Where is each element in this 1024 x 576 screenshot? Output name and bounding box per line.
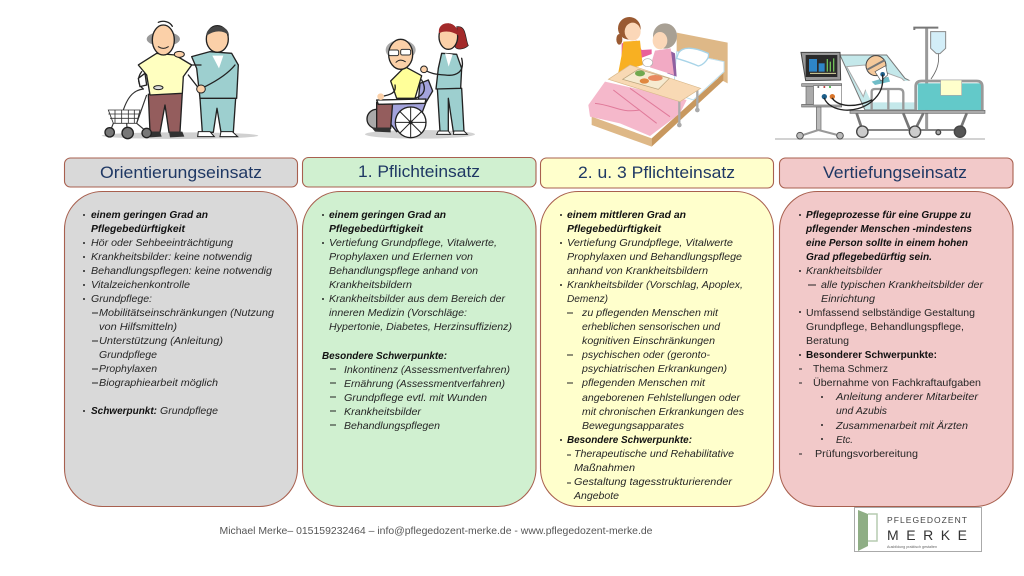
panel: 2. u. 3 Pflichteinsatz: kognitiven Einschränkungen [582, 335, 715, 347]
heading: Orientierungseinsatz [64, 158, 298, 187]
panel: 2. u. 3 Pflichteinsatz: Pflegebedürftigkeit [567, 223, 661, 235]
panel: Vertiefungseinsatz: pflegender Menschen -mindestens [805, 223, 972, 235]
panel: 1. Pflichteinsatz: Krankheitsbildern [329, 279, 412, 291]
panel: Vertiefungseinsatz: Einrichtung [821, 293, 875, 305]
panel: Orientierungseinsatz: Mobilitätseinschränkungen (Nutzung [99, 307, 274, 319]
heading: 2. u. 3 Pflichteinsatz [540, 158, 774, 188]
heading: Vertiefungseinsatz: Vertiefungseinsatz [823, 164, 967, 182]
panel: Orientierungseinsatz: Grundpflege [160, 405, 218, 417]
panel: Vertiefungseinsatz: eine Person sollte in einem hohen [806, 237, 968, 249]
panel: 2. u. 3 Pflichteinsatz: Maßnahmen [574, 462, 635, 474]
panel: Vertiefungseinsatz: Grundpflege, Behandlungspflege, [806, 321, 964, 333]
illustration: caregiver feeding woman in bed [588, 17, 728, 147]
panel: 2. u. 3 Pflichteinsatz: erheblichen sensorischen und [582, 321, 721, 333]
panel: 1. Pflichteinsatz: Prophylaxen und Erlernen von [329, 251, 473, 263]
panel: Orientierungseinsatz: von Hilfsmitteln) [99, 321, 177, 333]
heading: 1. Pflichteinsatz: 1. Pflichteinsatz [358, 163, 480, 181]
panel: Vertiefungseinsatz: Zusammenarbeit mit Ärzten [835, 420, 968, 432]
panel: 2. u. 3 Pflichteinsatz: einem mittleren Grad an [567, 209, 686, 221]
panel: Vertiefungseinsatz: und Azubis [836, 405, 888, 417]
heading: 2. u. 3 Pflichteinsatz: 2. u. 3 Pflichteinsatz [578, 164, 735, 182]
panel: Orientierungseinsatz: Biographiearbeit möglich [99, 377, 218, 389]
panel: 2. u. 3 Pflichteinsatz: angeborenen Fehlstellungen oder [582, 392, 740, 404]
panel: Orientierungseinsatz: Behandlungspflegen: keine notwendig [91, 265, 272, 277]
panel: 2. u. 3 Pflichteinsatz: pflegenden Menschen mit [581, 377, 706, 389]
panel: 2. u. 3 Pflichteinsatz: Therapeutische und Rehabilitative [574, 448, 734, 460]
panel: 2. u. 3 Pflichteinsatz: mit chronischen Erkrankungen des [582, 406, 745, 418]
panel: 1. Pflichteinsatz: einem geringen Grad an [329, 209, 446, 221]
panel: 1. Pflichteinsatz: Behandlungspflegen [344, 420, 440, 432]
panel: Orientierungseinsatz: Grundpflege: [91, 293, 152, 305]
logo: Pflegedozent Merke: MERKE [887, 527, 967, 543]
panel: Vertiefungseinsatz: Umfassend selbständige Gestaltung [806, 307, 975, 319]
panel: 1. Pflichteinsatz: Krankheitsbilder aus dem Bereich der [329, 293, 506, 305]
panel: 1. Pflichteinsatz: Hypertonie, Diabetes, Herzinsuffizienz) [329, 321, 512, 333]
heading: Vertiefungseinsatz [780, 158, 1013, 188]
panel: 1. Pflichteinsatz [302, 192, 536, 506]
panel: 1. Pflichteinsatz: Inkontinenz (Assessmentverfahren) [344, 364, 510, 376]
panel: Orientierungseinsatz: Krankheitsbilder: keine notwendig [91, 251, 252, 263]
panel: 2. u. 3 Pflichteinsatz: Gestaltung tagesstrukturierender [574, 476, 733, 488]
panel: Orientierungseinsatz: Grundpflege [99, 349, 157, 361]
panel: Vertiefungseinsatz: Thema Schmerz [813, 363, 888, 375]
panel: Orientierungseinsatz: Schwerpunkt: [91, 405, 157, 417]
panel: Vertiefungseinsatz: Beratung [806, 335, 849, 347]
panel: Vertiefungseinsatz: Pflegeprozesse für eine Gruppe zu [806, 209, 972, 221]
panel: Vertiefungseinsatz: Besonderer Schwerpunkte: [806, 349, 937, 361]
panel: Orientierungseinsatz: Vitalzeichenkontrolle [91, 279, 190, 291]
panel: Vertiefungseinsatz: Anleitung anderer Mitarbeiter [835, 391, 979, 403]
panel: 2. u. 3 Pflichteinsatz: psychiatrischen Erkrankungen) [581, 363, 727, 375]
heading: Orientierungseinsatz: Orientierungseinsatz [100, 164, 262, 182]
panel: 2. u. 3 Pflichteinsatz: Besondere Schwerpunkte: [567, 434, 692, 446]
panel: 2. u. 3 Pflichteinsatz: Prophylaxen und Behandlungspflege [567, 251, 742, 263]
panel: Orientierungseinsatz: einem geringen Grad an [91, 209, 208, 221]
panel: 2. u. 3 Pflichteinsatz: Vertiefung Grundpflege, Vitalwerte [567, 237, 733, 249]
panel: 2. u. 3 Pflichteinsatz: Demenz) [567, 293, 608, 305]
panel: 1. Pflichteinsatz: Behandlungspflege anhand von [329, 265, 478, 277]
illustration: senior with walker and nurse [102, 21, 258, 139]
panel: 1. Pflichteinsatz: Grundpflege evtl. mit Wunden [344, 392, 487, 404]
panel: 2. u. 3 Pflichteinsatz [540, 192, 774, 506]
panel: 2. u. 3 Pflichteinsatz: Angebote [573, 490, 619, 502]
panel: 1. Pflichteinsatz: inneren Medizin (Vorschläge: [329, 307, 467, 319]
illustration: intensive care patient in bed with monitor [775, 28, 985, 139]
logo: Pflegedozent Merke: PFLEGEDOZENT [887, 515, 967, 525]
panel: Orientierungseinsatz: Pflegebedürftigkeit [91, 223, 185, 235]
panel: Orientierungseinsatz: Unterstützung (Anleitung) [99, 335, 223, 347]
panel: 2. u. 3 Pflichteinsatz: anhand von Krankheitsbildern [567, 265, 708, 277]
panel: 1. Pflichteinsatz: Ernährung (Assessmentverfahren) [344, 378, 505, 390]
panel: Vertiefungseinsatz [780, 192, 1013, 506]
illustration: senior in wheelchair with nurse [365, 23, 475, 139]
panel: Orientierungseinsatz: Hör oder Sehbeeinträchtigung [91, 237, 233, 249]
panel: Vertiefungseinsatz: Etc. [836, 434, 853, 446]
panel: 1. Pflichteinsatz: Vertiefung Grundpflege, Vitalwerte, [329, 237, 497, 249]
logo: Pflegedozent Merke: Ausbildung praktisch gestalten [887, 544, 937, 549]
footer: contact line: Michael Merke– 015159232464 – info@pflegedozent-merke.de - www.pflegedozent-merke.de [220, 525, 653, 537]
panel: Vertiefungseinsatz: Krankheitsbilder [806, 265, 883, 277]
panel: 2. u. 3 Pflichteinsatz: Krankheitsbilder (Vorschlag, Apoplex, [567, 279, 743, 291]
logo: Pflegedozent Merke [854, 508, 982, 552]
panel: 2. u. 3 Pflichteinsatz: zu pflegenden Menschen mit [581, 307, 719, 319]
panel: 1. Pflichteinsatz: Krankheitsbilder [344, 406, 422, 418]
heading: 1. Pflichteinsatz [302, 158, 536, 187]
panel: 2. u. 3 Pflichteinsatz: psychischen oder (geronto- [581, 349, 710, 361]
panel: 1. Pflichteinsatz: Pflegebedürftigkeit [329, 223, 423, 235]
panel: Orientierungseinsatz: Prophylaxen [99, 363, 157, 375]
panel: Vertiefungseinsatz: Grad pflegebedürftig sein. [806, 251, 932, 263]
panel: 1. Pflichteinsatz: Besondere Schwerpunkte: [322, 350, 447, 362]
panel: Orientierungseinsatz [64, 192, 298, 506]
panel: Vertiefungseinsatz: Prüfungsvorbereitung [815, 448, 918, 460]
panel: 2. u. 3 Pflichteinsatz: Bewegungsapparates [582, 420, 685, 432]
panel: Vertiefungseinsatz: alle typischen Krankheitsbilder der [821, 279, 984, 291]
panel: Vertiefungseinsatz: Übernahme von Fachkraftaufgaben [813, 377, 981, 389]
